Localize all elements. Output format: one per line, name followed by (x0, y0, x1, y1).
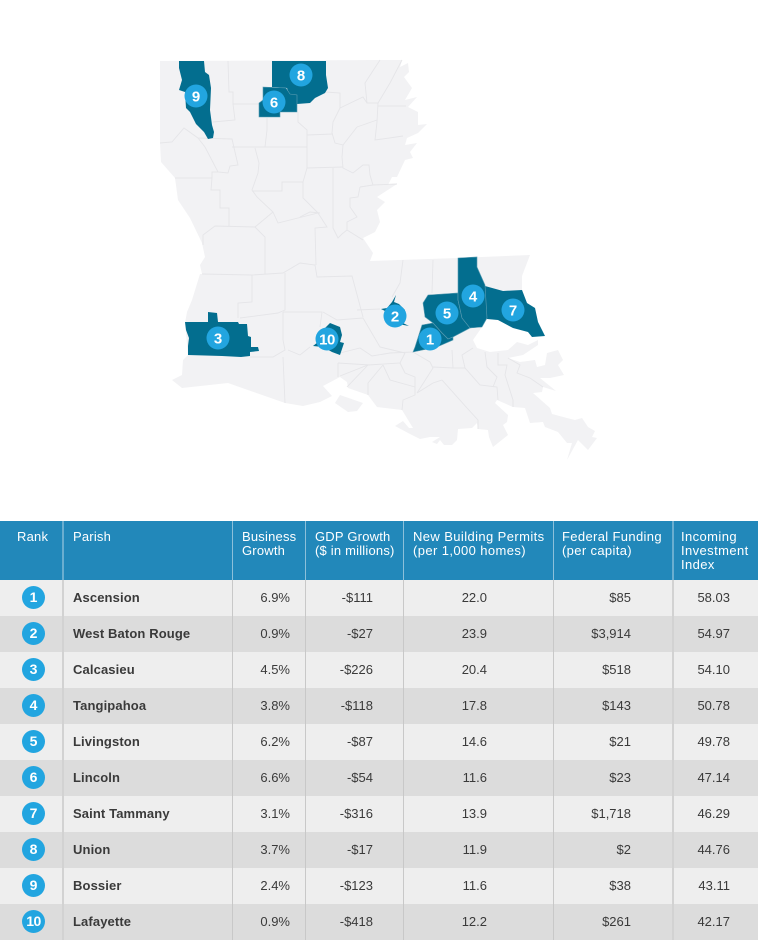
map markers (184, 64, 524, 350)
row 2: $3,914 (591, 626, 631, 641)
marker 7: 7 (509, 302, 517, 320)
row 9: $38 (609, 878, 631, 893)
row 3: 54.10 (697, 662, 730, 677)
row 4: Tangipahoa (73, 698, 146, 713)
row 8: $2 (617, 842, 631, 857)
table header: Incoming (681, 529, 737, 544)
row 9: 11.6 (463, 878, 487, 893)
marker 5: 5 (443, 306, 451, 322)
marker 10 (316, 328, 338, 350)
row 10: -$418 (340, 914, 373, 929)
table header: New Building Permits (413, 529, 545, 544)
parish 10: Lafayette (313, 323, 344, 355)
parish 7: Saint Tammany (485, 286, 545, 337)
row 10 (0, 904, 758, 940)
table header: Rank (17, 529, 48, 544)
row 3: -$226 (340, 662, 373, 677)
row 4: 4 (30, 697, 37, 713)
row 7: 3.1% (260, 806, 290, 821)
row 3: 20.4 (462, 662, 487, 677)
marker 2: 2 (391, 308, 399, 326)
row 4: 3.8% (260, 698, 290, 713)
parish 8: Union (272, 61, 328, 104)
row 6: 47.14 (697, 770, 730, 785)
row 1: $85 (609, 590, 631, 605)
parish 6: Lincoln (259, 87, 297, 117)
row 4: 17.8 (462, 698, 487, 713)
island: Marsh Island (335, 395, 363, 412)
row 5: -$87 (347, 734, 373, 749)
row 4: $143 (602, 698, 631, 713)
row 9: 9 (30, 877, 37, 893)
table header: Business (242, 529, 296, 544)
marker 4: 4 (469, 288, 478, 306)
table header: ($ in millions) (315, 543, 395, 558)
row 6: $23 (609, 770, 631, 785)
row 10: 42.17 (697, 914, 730, 929)
marker 6: 6 (270, 94, 278, 112)
row 6: -$54 (347, 770, 373, 785)
row 1: 22.0 (462, 590, 487, 605)
row 7: 7 (30, 805, 37, 821)
row 8 (0, 832, 758, 868)
marker 7 (502, 298, 524, 322)
row 1: Ascension (73, 590, 140, 605)
row 4: 50.78 (697, 698, 730, 713)
row 9: 2.4% (260, 878, 290, 893)
table header (0, 521, 758, 580)
row 2: 2 (30, 625, 37, 641)
row 1 (0, 580, 758, 616)
state outline (160, 60, 597, 460)
row 8: 3.7% (260, 842, 290, 857)
parish 4: Tangipahoa (458, 257, 487, 328)
marker 3 (206, 326, 230, 350)
row 6 (0, 760, 758, 796)
row 3: Calcasieu (73, 662, 135, 677)
row 2: West Baton Rouge (73, 626, 190, 641)
parish 3: Calcasieu (185, 312, 259, 357)
row 3 (0, 652, 758, 688)
row 5: 5 (30, 733, 37, 749)
row 5: 6.2% (260, 734, 290, 749)
row 8: 8 (30, 841, 37, 857)
marker 8: 8 (297, 68, 305, 84)
table header: GDP Growth (315, 529, 390, 544)
row 1: 58.03 (697, 590, 730, 605)
table header: Parish (73, 529, 111, 544)
row 5: Livingston (73, 734, 140, 749)
map: Louisiana parishes (160, 60, 596, 458)
parish 9: Bossier (179, 61, 214, 139)
row 8: Union (73, 842, 110, 857)
parish 2: West Baton Rouge (381, 295, 409, 326)
table header: Growth (242, 543, 285, 558)
marker 2 (384, 304, 406, 328)
ranking table (0, 521, 758, 940)
row 9: 43.11 (698, 878, 730, 893)
row 10: 10 (26, 913, 41, 929)
marker 9: 9 (192, 88, 200, 106)
row 7: 13.9 (462, 806, 487, 821)
table header: Federal Funding (562, 529, 662, 544)
row 2: 0.9% (260, 626, 290, 641)
marker 9 (184, 84, 208, 108)
row 4: -$118 (341, 698, 373, 713)
marker 4 (462, 284, 484, 308)
row 9: Bossier (73, 878, 122, 893)
row 2 (0, 616, 758, 652)
marker 10: 10 (319, 332, 335, 348)
row 8: 11.9 (463, 842, 487, 857)
parish 1: Ascension (413, 323, 453, 352)
row 6: 6 (30, 769, 37, 785)
row 3: 4.5% (260, 662, 290, 677)
row 3: 3 (30, 661, 37, 677)
marker 6 (262, 90, 286, 114)
row 5 (0, 724, 758, 760)
row 1: 1 (30, 589, 37, 605)
row 9 (0, 868, 758, 904)
marker 3: 3 (214, 330, 222, 348)
row 6: 6.6% (260, 770, 290, 785)
row 1: 6.9% (260, 590, 290, 605)
row 10: $261 (602, 914, 631, 929)
marker 8 (290, 64, 312, 86)
row 2: -$27 (347, 626, 373, 641)
table header: Investment (681, 543, 749, 558)
parish 5: Livingston (423, 293, 470, 339)
row 5: 14.6 (462, 734, 487, 749)
row 8: 44.76 (697, 842, 730, 857)
row 9: -$123 (340, 878, 373, 893)
row 6: Lincoln (73, 770, 120, 785)
marker 5 (436, 302, 458, 324)
row 6: 11.6 (463, 770, 487, 785)
parish boundaries (160, 60, 543, 429)
row 4 (0, 688, 758, 724)
row 2: 54.97 (697, 626, 730, 641)
table header: (per capita) (562, 543, 632, 558)
table header: (per 1,000 homes) (413, 543, 526, 558)
row 10: Lafayette (73, 914, 131, 929)
row 7: Saint Tammany (73, 806, 170, 821)
marker 1: 1 (426, 332, 434, 348)
row 5: 49.78 (697, 734, 730, 749)
row 7: -$316 (340, 806, 373, 821)
table header: Index (681, 557, 715, 572)
row 7 (0, 796, 758, 832)
row 10: 12.2 (462, 914, 487, 929)
row 1: -$111 (342, 590, 373, 605)
row 7: $1,718 (591, 806, 631, 821)
marker 1 (418, 328, 442, 350)
row 3: $518 (602, 662, 631, 677)
row 2: 23.9 (462, 626, 487, 641)
row 7: 46.29 (697, 806, 730, 821)
row 8: -$17 (347, 842, 373, 857)
row 10: 0.9% (260, 914, 290, 929)
row 5: $21 (609, 734, 631, 749)
